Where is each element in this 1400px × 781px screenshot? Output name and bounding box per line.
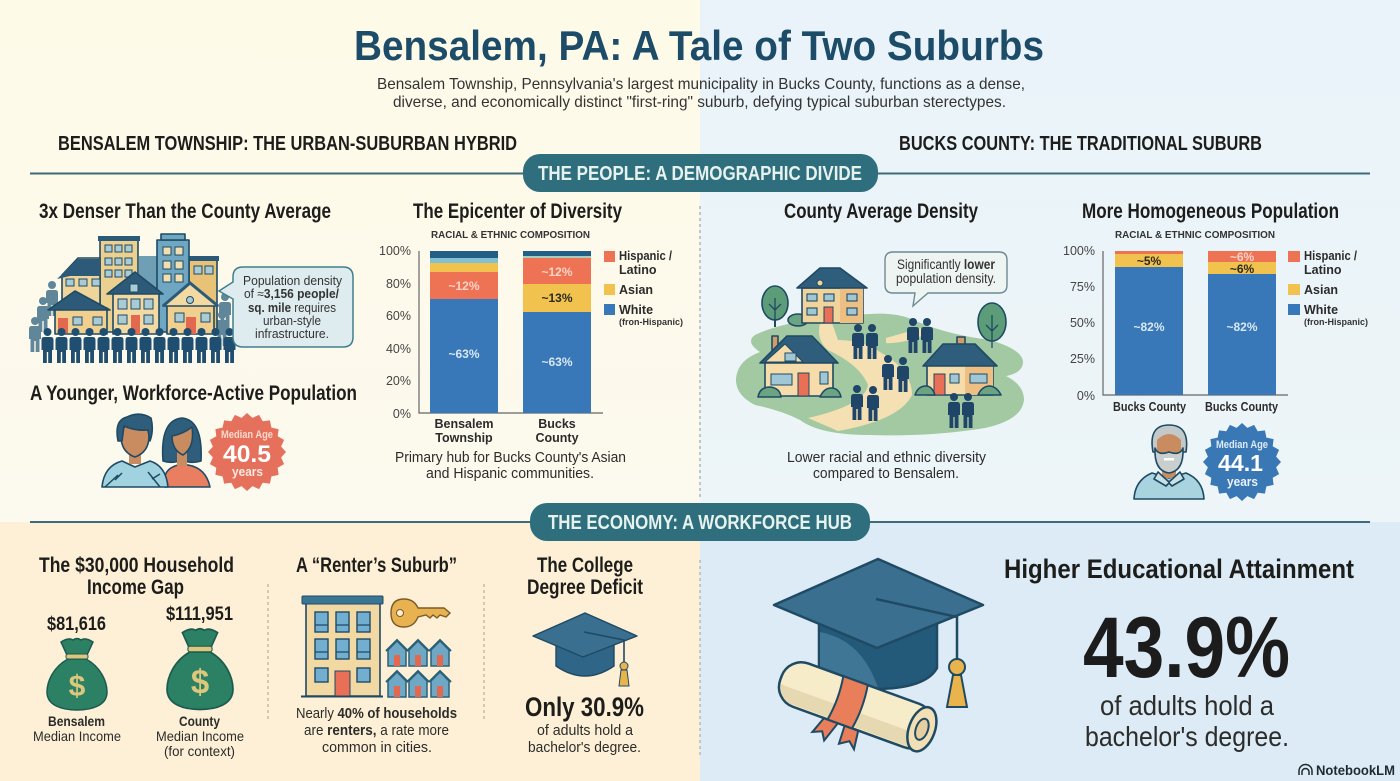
caption: lower diversity <box>787 449 986 482</box>
label: Bensalem median income: Median Income <box>33 728 121 744</box>
legend: (fron-Hispanic) <box>619 317 683 328</box>
icon: large graduation cap and diploma <box>766 559 983 775</box>
chart subtitle: RACIAL & ETHNIC COMPOSITION <box>1115 229 1275 241</box>
legend: Asian <box>1304 283 1338 297</box>
icon: apartment building <box>301 596 383 696</box>
legend: White <box>619 303 653 317</box>
legend: Hispanic / <box>619 249 672 263</box>
caption: renters <box>296 705 457 756</box>
legend: Hispanic / <box>1304 249 1357 263</box>
bar chart: Bensalem vs Bucks: 0% <box>393 407 411 421</box>
legend: Latino <box>1304 263 1342 277</box>
heading: county average density: County Average Density <box>784 200 978 223</box>
bar chart: Bucks County: ~82% <box>1133 320 1165 334</box>
callout: lower density: Significantly lower <box>897 257 996 272</box>
stat: 43.9%: 43.9% <box>1083 600 1290 696</box>
badge: median age 40.5 <box>208 413 286 491</box>
panel: renter's suburb <box>296 554 457 756</box>
icon: money bag county: $ <box>191 664 210 702</box>
value: Bensalem income: $81,616 <box>47 614 106 635</box>
panel: college degree deficit <box>525 554 644 756</box>
bar chart: Bucks County: 0% <box>1077 389 1095 403</box>
bar chart: Bensalem vs Bucks: County <box>535 431 579 445</box>
panel: higher educational attainment <box>766 554 1354 775</box>
panel: Bensalem density <box>29 200 353 363</box>
title: Bensalem, PA: A Tale of Two Suburbs <box>354 22 1044 69</box>
bar chart: Bensalem vs Bucks <box>379 244 603 445</box>
caption: adults with degrees <box>1085 690 1289 752</box>
icon: money bag Bensalem: $ <box>69 670 86 703</box>
caption: bachelor's degree: of adults hold a <box>537 722 634 739</box>
icon: money bag county <box>167 629 233 709</box>
chart subtitle: RACIAL & ETHNIC COMPOSITION <box>431 229 590 241</box>
caption: adults with degrees: of adults hold a <box>1100 690 1274 721</box>
caption: primary hub: and Hispanic communities. <box>426 465 594 482</box>
section banner: the economy <box>530 503 870 541</box>
callout: population density: infrastructure. <box>255 327 329 341</box>
bar chart: Bensalem vs Bucks: 40% <box>386 342 411 356</box>
icon: key <box>391 599 450 627</box>
icon: young couple <box>102 414 210 487</box>
caption: primary hub: Primary hub for Bucks County's Asian <box>395 449 626 466</box>
bar chart: Bucks County: 50% <box>1070 316 1095 330</box>
bar chart: Bensalem vs Bucks: Bensalem <box>434 417 494 431</box>
bar chart: Bensalem vs Bucks: ~12% <box>541 265 573 279</box>
callout: lower density <box>885 252 1007 306</box>
subtitle: diverse, and economically distinct "first-ring" suburb, defying typical suburban sterectypes. <box>393 94 1006 111</box>
heading: degree deficit: The College <box>537 554 633 577</box>
callout: population density: urban-style <box>263 314 321 328</box>
caption: renters: common in cities. <box>322 739 432 756</box>
bar chart: Bensalem vs Bucks: Township <box>435 431 493 445</box>
callout: population density: sq. mile requires <box>248 301 336 315</box>
bar chart: Bucks County: 100% <box>1063 244 1095 258</box>
caption: lower diversity: Lower racial and ethnic diversity <box>787 449 986 466</box>
heading: younger workforce: A Younger, Workforce-Active Population <box>30 382 357 405</box>
badge: median age 40.5: Median Age <box>221 429 273 441</box>
section banner: the people: THE PEOPLE: A DEMOGRAPHIC DIVIDE <box>538 163 862 185</box>
heading: income gap <box>39 554 234 599</box>
badge: median age 44.1: 44.1 <box>1218 450 1263 476</box>
value: county income: $111,951 <box>166 604 233 625</box>
subtitle: Bensalem Township, Pennsylvania's largest municipality in Bucks County, functions as a dense, <box>377 76 1025 93</box>
icon: small graduation cap <box>533 613 637 686</box>
badge: median age 40.5: years <box>232 464 263 479</box>
watermark: NotebookLM: NotebookLM <box>1316 763 1395 778</box>
label: Bensalem median income: Bensalem <box>48 713 105 729</box>
heading: income gap: The $30,000 Household <box>39 554 234 577</box>
subtitle <box>377 76 1025 111</box>
caption: bachelor's degree: bachelor's degree. <box>528 739 641 756</box>
icon: row houses <box>386 640 451 697</box>
badge: median age 44.1: Median Age <box>1216 439 1268 451</box>
bar chart: Bensalem vs Bucks: 60% <box>386 309 411 323</box>
legend: White <box>1304 303 1338 317</box>
bar chart: Bucks County: 75% <box>1070 280 1095 294</box>
bar chart: Bucks County: 25% <box>1070 352 1095 366</box>
bar chart: Bucks County: ~82% <box>1226 320 1258 334</box>
heading: income gap: Income Gap <box>87 576 184 599</box>
label: county median income <box>156 713 244 759</box>
bar chart: Bensalem vs Bucks: Bucks <box>538 417 576 431</box>
illustration: suburban neighborhood <box>736 268 1024 435</box>
icon: dense city and houses <box>29 234 236 363</box>
label: Bensalem median income <box>33 713 121 744</box>
panel: income gap <box>33 554 244 759</box>
badge: median age 44.1 <box>1203 423 1281 501</box>
heading: higher attainment: Higher Educational Attainment <box>1004 554 1354 584</box>
bar chart: Bensalem vs Bucks: 20% <box>386 374 411 388</box>
panel: homogeneous population <box>1063 200 1368 501</box>
section banner: the people <box>523 154 878 192</box>
bar chart: Bensalem vs Bucks: 100% <box>379 244 411 258</box>
bar chart: Bucks County: ~6% <box>1230 262 1255 276</box>
panel: younger population <box>30 382 357 491</box>
heading: degree deficit: Degree Deficit <box>527 576 643 599</box>
bar chart: Bensalem vs Bucks: ~63% <box>448 347 480 361</box>
caption: bachelor's degree <box>528 722 641 756</box>
caption: primary hub <box>395 449 626 482</box>
legend: Asian <box>619 283 653 297</box>
section banner: the economy: THE ECONOMY: A WORKFORCE HUB <box>548 512 852 534</box>
legend: (fron-Hispanic) <box>1304 317 1368 328</box>
heading: epicenter: The Epicenter of Diversity <box>413 200 622 223</box>
legend <box>604 249 683 328</box>
caption: lower diversity: compared to Bensalem. <box>813 465 959 482</box>
icon: money bag Bensalem <box>47 638 107 710</box>
legend: Latino <box>619 263 657 277</box>
bar chart: Bucks County <box>1063 244 1288 414</box>
bar chart: Bucks County: ~5% <box>1137 254 1162 268</box>
callout: population density <box>219 267 353 347</box>
icon: older man <box>1134 425 1204 499</box>
callout: lower density: population density. <box>896 271 996 286</box>
stat: 30.9%: Only 30.9% <box>525 692 644 722</box>
label: county median income: Median Income <box>156 728 244 744</box>
bar chart: Bensalem vs Bucks: ~63% <box>541 355 573 369</box>
bar chart: Bensalem vs Bucks: 80% <box>386 277 411 291</box>
caption: renters: Nearly 40% of households <box>296 705 457 722</box>
caption: renters: are renters, a rate more <box>304 722 449 739</box>
heading: Bucks County column: BUCKS COUNTY: THE TRADITIONAL SUBURB <box>899 133 1262 155</box>
badge: median age 44.1: years <box>1227 474 1258 489</box>
badge: median age 40.5: 40.5 <box>223 441 271 468</box>
bar chart: Bucks County: Bucks County <box>1205 400 1278 414</box>
heading: Bensalem column: BENSALEM TOWNSHIP: THE URBAN-SUBURBAN HYBRID <box>58 133 517 155</box>
panel: epicenter of diversity <box>379 200 683 482</box>
callout: population density: Population density <box>243 274 343 288</box>
heading: homogeneous: More Homogeneous Population <box>1082 200 1339 223</box>
legend <box>1288 249 1368 328</box>
bar chart: Bensalem vs Bucks: ~13% <box>541 291 573 305</box>
callout: population density: of ≈3,156 people/ <box>244 287 339 301</box>
heading: renter's suburb: A “Renter’s Suburb” <box>296 554 457 577</box>
caption: adults with degrees: bachelor's degree. <box>1085 721 1289 752</box>
bar chart: Bucks County: Bucks County <box>1113 400 1186 414</box>
panel: county density <box>736 200 1024 482</box>
bar chart: Bensalem vs Bucks: ~12% <box>448 279 480 293</box>
label: county median income: (for context) <box>164 743 235 759</box>
heading: degree deficit <box>527 554 643 599</box>
heading: 3x denser: 3x Denser Than the County Average <box>39 200 331 223</box>
bar chart: Bucks County: ~6% <box>1230 250 1255 264</box>
label: county median income: County <box>179 713 220 729</box>
